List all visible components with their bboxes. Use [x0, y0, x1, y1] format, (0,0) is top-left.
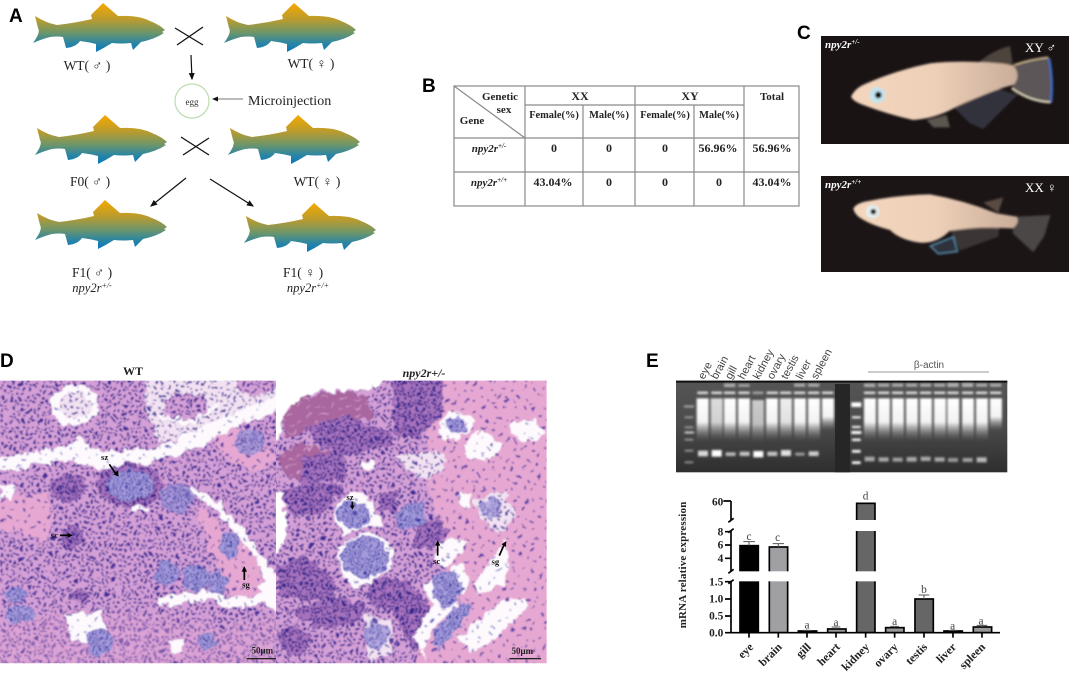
- table text: sex: [497, 104, 512, 116]
- significance letters: c: [775, 532, 780, 544]
- gel image: [676, 381, 1007, 472]
- egg: [175, 84, 209, 118]
- table grid: [454, 86, 799, 206]
- microinjection arrow: [213, 98, 243, 100]
- significance letters: [746, 491, 983, 632]
- cross 2: [181, 137, 209, 155]
- category labels: heart: [815, 641, 843, 669]
- scale bar: [509, 646, 541, 659]
- gel tissue labels: kidney: [751, 347, 777, 381]
- category labels: testis: [903, 640, 930, 668]
- y axis title: mRNA relative expression: [677, 502, 689, 628]
- significance letters: a: [950, 620, 955, 632]
- arrow to egg: [191, 55, 192, 79]
- tick labels: 0.0: [709, 627, 724, 639]
- gel tissue labels: spleen: [809, 347, 835, 381]
- axes: [723, 501, 1000, 638]
- table text: +/-: [498, 142, 507, 150]
- gel tissue labels: ovary: [765, 352, 789, 381]
- photo: male npy2r+/-: [821, 36, 1069, 144]
- fish: F1 female: [244, 203, 376, 252]
- micrograph npy2r+/-: [276, 380, 547, 664]
- table text: Total: [760, 91, 784, 103]
- significance letters: d: [863, 491, 869, 503]
- table text: 56.96%: [752, 141, 792, 155]
- table text: XY: [681, 89, 699, 103]
- tick labels: 6: [718, 540, 724, 552]
- annotation sg: [242, 566, 250, 589]
- microinjection label: Microinjection: [248, 94, 331, 109]
- table text: [460, 89, 792, 189]
- panel B: genotype table: [422, 76, 799, 206]
- gel tissue labels: gill: [723, 364, 740, 381]
- scale bar: [247, 645, 278, 659]
- annotation sz: sz: [101, 452, 108, 462]
- gel tissue labels: brain: [709, 354, 731, 381]
- table text: 0: [716, 175, 722, 189]
- table text: 0: [606, 175, 612, 189]
- label A: A: [9, 6, 23, 27]
- tick labels: [709, 497, 724, 639]
- table text: 0: [662, 141, 668, 155]
- table text: npy2r: [471, 177, 497, 189]
- table text: Gene: [460, 115, 484, 127]
- panel D: histology: [0, 351, 560, 674]
- category labels: kidney: [839, 640, 872, 674]
- panel C: fish photographs: [797, 23, 1069, 272]
- table text: 0: [606, 141, 612, 155]
- tick labels: 60: [712, 497, 724, 509]
- tick labels: 4: [718, 553, 724, 565]
- heading WT: WT: [123, 364, 143, 378]
- fish labels: npy2r: [72, 281, 101, 295]
- table text: Male(%): [699, 110, 739, 121]
- fish: WT female second row: [228, 115, 360, 164]
- heading npy2r+/-: npy2r+/-: [403, 366, 445, 380]
- annotation sz: sz: [346, 492, 354, 502]
- fish labels: npy2r: [287, 281, 316, 295]
- fish labels: WT( ♀ ): [288, 56, 334, 71]
- genotype caption: npy2r: [825, 179, 851, 191]
- fish labels: WT( ♀ ): [294, 174, 340, 189]
- arrow to F1 female: [210, 179, 253, 206]
- bars: [740, 503, 992, 633]
- sex caption: XY ♂: [1025, 40, 1056, 55]
- table text: +/+: [497, 176, 507, 184]
- annotation sz: [346, 492, 355, 510]
- significance letters: b: [921, 584, 927, 596]
- egg: egg: [186, 97, 199, 107]
- category labels: [735, 640, 988, 674]
- annotation sg: [491, 541, 506, 566]
- significance letters: a: [978, 615, 983, 627]
- table text: 0: [662, 175, 668, 189]
- label D: D: [0, 351, 14, 372]
- tick labels: 1.0: [709, 594, 724, 606]
- table text: Female(%): [640, 110, 690, 121]
- table text: 43.04%: [534, 175, 572, 189]
- significance letters: a: [892, 616, 897, 628]
- fish: F1 male: [35, 200, 167, 249]
- fish labels: F1( ♂ ): [72, 265, 112, 280]
- target bands: [698, 450, 819, 457]
- scale bar: 50μm: [512, 646, 534, 656]
- photo: female npy2r+/+: [821, 176, 1069, 272]
- table text: XX: [571, 89, 589, 103]
- panel E: expression: [646, 347, 1007, 674]
- fish labels: +/+: [316, 281, 329, 290]
- annotation sc: [51, 530, 73, 540]
- fish labels: +/-: [101, 281, 112, 290]
- annotation sg: sg: [491, 556, 500, 566]
- category labels: spleen: [957, 640, 988, 672]
- actin bands: [865, 457, 987, 462]
- gel tissue labels: [696, 347, 835, 381]
- category labels: gill: [794, 640, 814, 661]
- gel tissue labels: heart: [736, 354, 758, 381]
- tick labels: 0.5: [709, 611, 724, 623]
- cross 1: [175, 27, 203, 45]
- micrograph WT: [0, 380, 276, 664]
- fish labels: WT( ♂ ): [64, 58, 110, 73]
- annotation sg: sg: [242, 579, 250, 589]
- significance letters: c: [746, 531, 752, 543]
- fish labels: F1( ♀ ): [283, 265, 323, 280]
- label C: C: [797, 23, 811, 44]
- category labels: brain: [756, 640, 785, 669]
- table text: Male(%): [589, 110, 629, 121]
- fish labels: F0( ♂ ): [70, 174, 110, 189]
- error bars: [743, 542, 987, 631]
- category labels: liver: [934, 641, 959, 666]
- fish: WT male: [33, 3, 165, 52]
- label E: E: [646, 351, 659, 372]
- gel tissue labels: liver: [794, 358, 814, 381]
- arrow to F1 male: [151, 178, 186, 206]
- table text: Genetic: [482, 91, 518, 103]
- table text: 43.04%: [752, 175, 792, 189]
- ladder 1 bands: [684, 406, 694, 463]
- annotation sc: sc: [433, 556, 440, 566]
- tick labels: 1.5: [709, 576, 724, 588]
- genotype caption: npy2r: [825, 39, 851, 51]
- genotype caption: +/-: [851, 38, 860, 46]
- fish: WT female: [224, 3, 356, 52]
- fish: F0 male: [35, 115, 167, 164]
- category labels: eye: [735, 641, 756, 661]
- panel A: breeding scheme: [9, 3, 376, 295]
- tick labels: 8: [718, 526, 724, 538]
- category labels: ovary: [871, 640, 901, 670]
- table text: 56.96%: [698, 141, 738, 155]
- table text: 0: [551, 141, 557, 155]
- fish labels: [64, 56, 340, 295]
- table text: Female(%): [529, 110, 579, 121]
- label B: B: [422, 76, 436, 97]
- scale bar: 50μm: [252, 645, 274, 655]
- gel tissue labels: testis: [779, 353, 802, 381]
- ladder 2 bands: [851, 402, 861, 464]
- beta-actin label: [868, 360, 989, 372]
- annotation sc: sc: [51, 530, 58, 540]
- annotation sc: [433, 540, 440, 566]
- axis breaks: [728, 520, 882, 581]
- beta-actin label: β-actin: [914, 360, 944, 371]
- gel tissue labels: eye: [696, 360, 715, 381]
- significance letters: a: [804, 619, 810, 631]
- annotation sz: [101, 452, 119, 477]
- genotype caption: +/+: [851, 178, 861, 186]
- table text: npy2r: [472, 143, 498, 155]
- sex caption: XX ♀: [1025, 180, 1057, 195]
- bar chart: [677, 491, 1000, 674]
- significance letters: a: [833, 617, 838, 629]
